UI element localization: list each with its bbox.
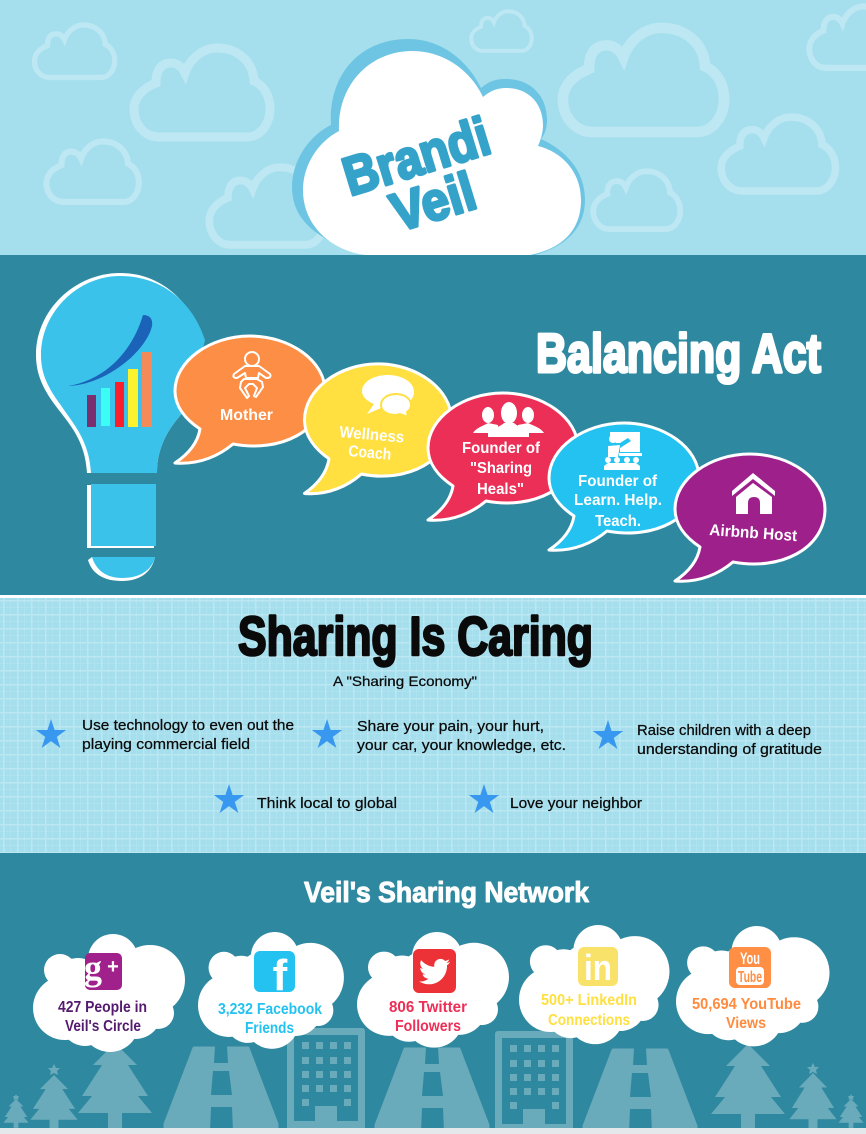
speech bubble: Mother: Mother	[220, 407, 273, 424]
main cloud	[292, 39, 585, 255]
icon: baby	[233, 352, 270, 398]
icon: youtube: You	[740, 949, 760, 968]
speech bubble: Founder of Sharing Heals	[428, 393, 578, 520]
panel: sky header	[0, 0, 866, 255]
panel: sharing network	[0, 853, 866, 1134]
heading: Sharing Is Caring: Sharing Is Caring	[238, 605, 593, 667]
divider band	[0, 595, 866, 598]
icon: google plus: g	[84, 948, 102, 988]
name: Brandi Veil: Veil	[384, 161, 483, 243]
speech bubble: Wellness Coach	[304, 364, 452, 494]
cloud: Facebook: 3,232 Facebook	[218, 1001, 322, 1018]
item: share: your car, your knowledge, etc.	[357, 737, 566, 754]
cloud: Twitter	[357, 932, 509, 1048]
speech bubble: Wellness Coach: Coach	[348, 443, 392, 464]
item: raise children	[593, 720, 822, 758]
cloud: Google Plus	[33, 934, 185, 1052]
item: think local	[214, 784, 397, 813]
item: share	[312, 718, 566, 754]
item: technology: Use technology to even out the	[82, 717, 294, 734]
cloud: Facebook: Friends	[245, 1020, 294, 1037]
cloud: Twitter: Followers	[395, 1018, 461, 1035]
cloud: LinkedIn: Connections	[548, 1012, 630, 1029]
heading: network: Veil's Sharing Network	[304, 877, 590, 909]
name: Brandi Veil: Brandi	[336, 106, 497, 207]
icon: youtube	[729, 947, 771, 988]
icon: facebook	[254, 951, 295, 1000]
icon: linkedin: in	[584, 947, 612, 988]
cloud: Facebook	[198, 932, 344, 1049]
item: raise children: Raise children with a deep	[637, 722, 811, 739]
name: Brandi Veil	[336, 106, 497, 243]
icon: google plus: +	[107, 956, 119, 978]
cloud: Google Plus: 427 People in	[58, 999, 147, 1016]
icon: chat bubbles	[362, 375, 414, 417]
icon: teacher and class	[604, 432, 642, 470]
bottom edge band	[0, 1128, 866, 1134]
item: love your neighbor: Love your neighbor	[510, 795, 642, 812]
speech bubble: Founder of Sharing Heals: Founder of	[462, 440, 541, 457]
speech bubble: Founder of Sharing Heals: "Sharing	[470, 460, 532, 477]
cloud: Google Plus: Veil's Circle	[65, 1018, 141, 1035]
item: share: Share your pain, your hurt,	[357, 718, 544, 735]
speech bubble: Founder of Sharing Heals: Heals"	[477, 481, 524, 498]
cloud: Twitter: 806 Twitter	[389, 999, 467, 1016]
item: love your neighbor	[469, 784, 642, 813]
speech bubble: Airbnb Host: Airbnb Host	[709, 522, 798, 545]
icon: facebook: f	[273, 951, 288, 1000]
icon: google plus	[84, 948, 122, 990]
panel: sharing is caring	[0, 598, 866, 853]
item: raise children: understanding of gratitude	[637, 741, 822, 758]
icon: twitter	[413, 949, 456, 993]
cloud: LinkedIn: 500+ LinkedIn	[541, 992, 637, 1009]
cloud: LinkedIn	[519, 925, 669, 1044]
scenery: trees, roads, buildings	[3, 1028, 864, 1134]
speech bubble: Founder of Learn. Help. Teach.	[549, 423, 699, 550]
icon: three people	[473, 402, 544, 437]
speech bubble: Founder of Learn. Help. Teach.: Teach.	[595, 513, 641, 530]
panel: balancing act	[0, 255, 866, 595]
speech bubble: Airbnb Host	[675, 454, 825, 581]
icon: house	[732, 473, 775, 514]
item: think local: Think local to global	[257, 795, 397, 812]
cloud: YouTube: Views	[726, 1015, 766, 1032]
cloud: YouTube: 50,694 YouTube	[692, 996, 801, 1013]
speech bubble: Founder of Learn. Help. Teach.: Founder of	[578, 473, 658, 490]
icon: light bulb with growth chart	[36, 273, 205, 581]
icon: youtube: Tube	[738, 969, 762, 986]
item: technology	[36, 717, 294, 753]
cloud: YouTube	[676, 926, 830, 1046]
subheading: A "Sharing Economy"	[333, 673, 477, 689]
speech bubble: Mother	[175, 336, 325, 463]
speech bubble: Wellness Coach: Wellness	[339, 424, 405, 447]
item: technology: playing commercial field	[82, 736, 250, 753]
speech bubble: Founder of Learn. Help. Teach.: Learn. Help.	[574, 492, 662, 509]
background outline clouds	[34, 6, 866, 245]
